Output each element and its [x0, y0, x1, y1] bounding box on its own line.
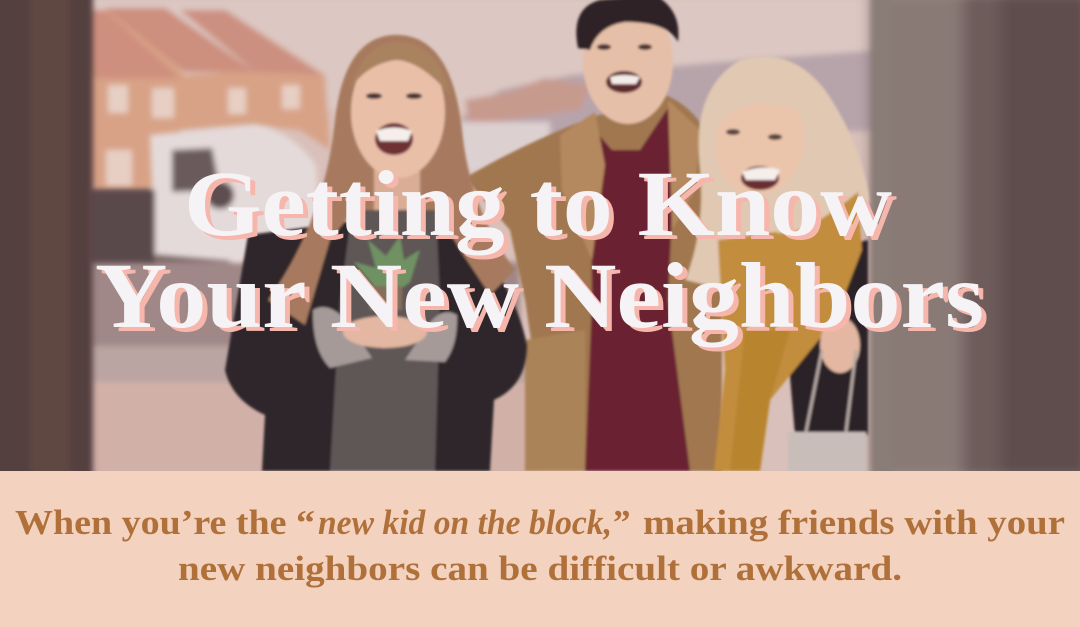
- woman holding a plant: [225, 35, 527, 471]
- left door frame: [0, 0, 93, 480]
- intro text: new neighbors can be difficult or awkward.: [178, 549, 902, 588]
- intro text: making friends with your: [643, 503, 1065, 542]
- title line two: Your New Neighbors: [100, 249, 989, 352]
- title line one: Getting to Know: [189, 157, 897, 260]
- intro band: [0, 471, 1080, 627]
- icon: potted succulent: [354, 236, 420, 310]
- right door frame: [872, 0, 1080, 480]
- title line two: Your New Neighbors: [95, 245, 984, 348]
- right door edge overlap: [868, 0, 880, 471]
- intro text: [15, 503, 1065, 588]
- street background: [85, 0, 890, 482]
- intro text: When you’re the “: [15, 503, 315, 542]
- photo: three neighbors at the door: [0, 0, 1080, 482]
- man in corduroy jacket: [465, 0, 722, 471]
- intro text: new kid on the block,: [318, 503, 612, 542]
- gift bag: [788, 350, 866, 477]
- title: [95, 153, 989, 352]
- title line one: Getting to Know: [184, 153, 892, 256]
- white van: [90, 125, 320, 262]
- woman with mustard scarf: [685, 56, 870, 477]
- intro text: ”: [613, 503, 630, 542]
